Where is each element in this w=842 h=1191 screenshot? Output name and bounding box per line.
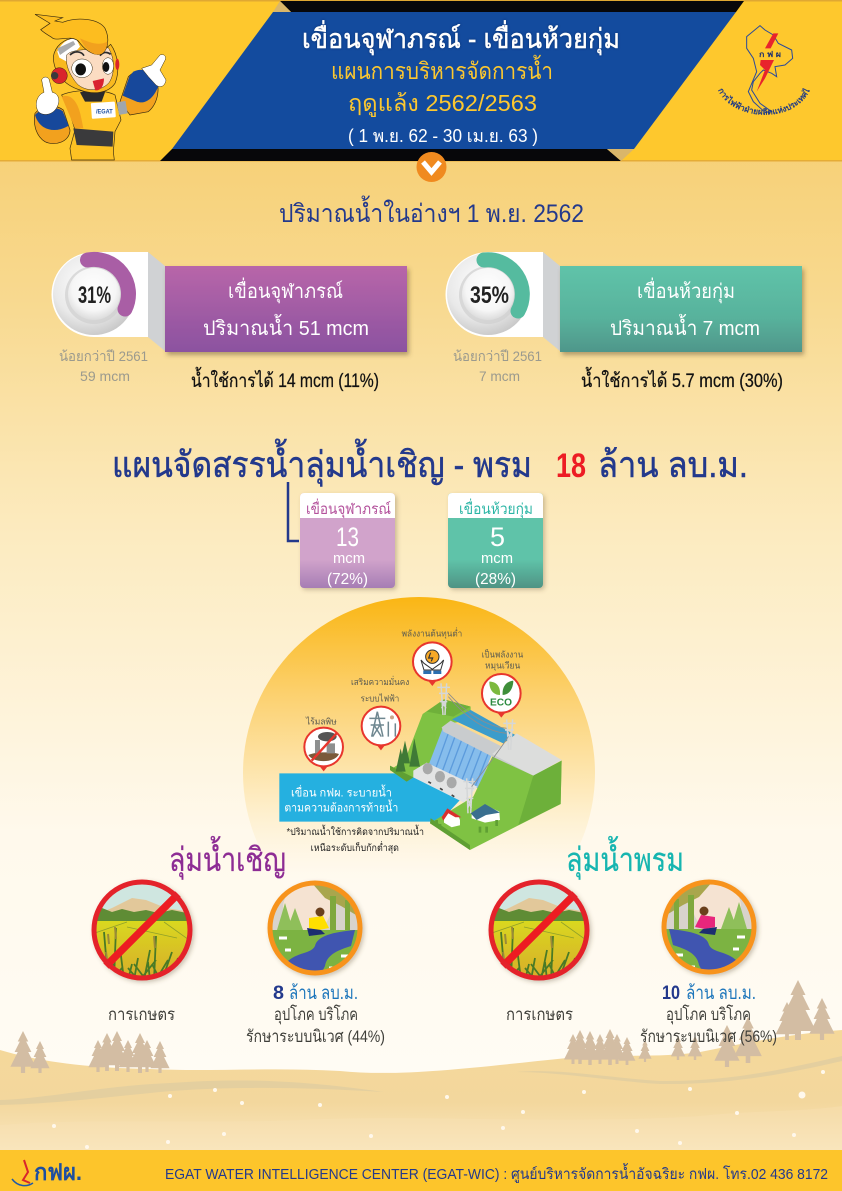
landscape: hills, trees and flowers [0, 980, 842, 1151]
blue release label: ตามความต้องการท้ายน้ำ [284, 800, 398, 815]
card: Chulabhorn allocation: mcm [333, 550, 365, 567]
heading: allocation plan: ล้าน ลบ.ม. [598, 444, 748, 485]
card: Huai Kum allocation: 5 [490, 522, 505, 552]
mascot face [66, 48, 113, 90]
map outline [747, 26, 793, 112]
footnote: เหนือระดับเก็บกักต่ำสุด [311, 841, 399, 854]
dam crest and road [442, 721, 535, 776]
card: Chulabhorn allocation [300, 493, 395, 588]
footer logo [12, 1159, 82, 1186]
pin: low cost energy [402, 627, 462, 686]
EGAT badge: /EGAT [96, 109, 113, 116]
gauge 31%: 31% [78, 282, 111, 309]
card: Chulabhorn allocation: 13 [336, 522, 359, 552]
text: Chern ecosystem allocation: 8 [273, 983, 284, 1004]
header title lines: เขื่อนจุฬาภรณ์ - เขื่อนห้วยกุ่ม [302, 20, 620, 56]
text: Phrom ecosystem allocation: รักษาระบบนิเวศ (56%) [640, 1027, 777, 1046]
gauge 35%: 35% [470, 282, 509, 309]
pin: stable power system: เสริมความมั่นคง [351, 675, 409, 687]
date range: ( 1 พ.ย. 62 - 30 เม.ย. 63 ) [348, 126, 538, 146]
logo letters: ก ฟ ผ [759, 50, 781, 59]
EGAT badge [91, 102, 116, 119]
previous year note: น้อยกว่าปี 2561 [59, 348, 148, 364]
header subtitle: แผนการบริหารจัดการน้ำ [331, 55, 553, 84]
icon: ecosystem, Phrom [663, 881, 755, 975]
teal value box [560, 266, 802, 352]
bottom black strip [160, 149, 621, 161]
pine trees [396, 738, 420, 772]
blue release label [279, 773, 460, 822]
reservoir water [452, 710, 515, 743]
card: Huai Kum allocation [448, 493, 543, 588]
panel: Huai Kum dam [446, 252, 802, 392]
mascot left hand [36, 77, 59, 114]
card: Chulabhorn allocation: (72%) [327, 571, 368, 588]
pin: renewable energy ECO: ECO [490, 698, 512, 709]
right tree clusters [564, 980, 835, 1067]
label: agriculture, Phrom: การเกษตร [506, 1005, 573, 1024]
footnote: *ปริมาณน้ำใช้การคิดจากปริมาณน้ำ [287, 824, 424, 838]
heading: allocation plan: แผนจัดสรรน้ำลุ่มน้ำเชิญ - พรม [112, 438, 532, 487]
text: Chern ecosystem allocation: รักษาระบบนิเวศ (44%) [246, 1027, 385, 1046]
lightning bolt lower [757, 60, 774, 92]
previous year note [453, 348, 542, 384]
icon: ecosystem, Chern [269, 882, 361, 976]
card: Huai Kum allocation: mcm [481, 550, 513, 567]
top black strip [280, 1, 744, 12]
EGAT logo: Thailand map [718, 25, 810, 115]
transmission towers [437, 683, 516, 813]
lightning bolt upper [765, 33, 778, 48]
sun semicircle backdrop [243, 597, 595, 949]
text: Phrom ecosystem allocation [640, 983, 777, 1046]
teal value box: ปริมาณน้ำ 7 mcm [610, 314, 760, 340]
text: Phrom ecosystem allocation: ล้าน ลบ.ม. [686, 983, 756, 1004]
meadow flowers [52, 1070, 825, 1149]
footer bar [0, 1150, 842, 1191]
heading: allocation plan [112, 438, 748, 487]
text: Chern ecosystem allocation: ล้าน ลบ.ม. [289, 983, 358, 1004]
header band [0, 0, 842, 162]
usable water: น้ำใช้การได้ 5.7 mcm (30%) [581, 367, 783, 392]
pin: renewable energy ECO: เป็นพลังงาน [482, 647, 523, 659]
section heading: water volume: ปริมาณน้ำในอ่างฯ 1 พ.ย. 2562 [279, 195, 584, 228]
purple value box: ปริมาณน้ำ 51 mcm [203, 314, 369, 340]
pin: no pollution [304, 717, 343, 771]
icon: no agriculture, Phrom [489, 880, 589, 983]
heading: Chern basin: ลุ่มน้ำเชิญ [169, 836, 286, 880]
mascot left arm [34, 106, 70, 144]
previous year note: 7 mcm [479, 368, 520, 384]
purple value box [165, 266, 407, 352]
mascot helmet [53, 38, 118, 93]
mascot torso [62, 91, 121, 160]
white tab and fold [52, 252, 148, 337]
footer logo: กฟผ. [34, 1159, 82, 1185]
pin: low cost energy: พลังงานต้นทุนต่ำ [402, 627, 462, 640]
left green hill [390, 699, 471, 782]
arc guide for organisation name [718, 90, 810, 115]
spillway [427, 727, 492, 788]
card: Huai Kum allocation: เขื่อนห้วยกุ่ม [459, 498, 533, 519]
season text: ฤดูแล้ง 2562/2563 [348, 90, 537, 117]
dam illustration [279, 627, 562, 854]
left tree clusters [10, 1031, 170, 1073]
text: Chern ecosystem allocation: อุปโภค บริโภค [274, 1004, 358, 1025]
pin: stable power system: ระบบไฟฟ้า [361, 694, 399, 704]
mascot right arm [120, 71, 158, 115]
houses [444, 810, 460, 827]
mascot headphone [51, 68, 67, 84]
heading: allocation plan: 18 [556, 447, 586, 485]
label: agriculture, Chern: การเกษตร [108, 1005, 175, 1024]
concrete base [413, 763, 477, 803]
panel: Chulabhorn dam [52, 252, 407, 392]
blue release label: เขื่อน กฟผ. ระบายน้ำ [291, 785, 392, 800]
card: Chulabhorn allocation: เขื่อนจุฬาภรณ์ [306, 498, 391, 519]
mascot helmet crest [35, 14, 108, 54]
previous year note: 59 mcm [80, 368, 130, 384]
mascot character [34, 14, 166, 160]
text: Phrom ecosystem allocation: 10 [662, 983, 680, 1004]
pin: renewable energy ECO [482, 647, 523, 718]
icon: no agriculture, Chern [92, 880, 192, 983]
mascot right hand [142, 55, 166, 87]
gauge 31% [53, 253, 135, 335]
text: Phrom ecosystem allocation: อุปโภค บริโภค [666, 1004, 751, 1025]
blue parallelogram [172, 12, 736, 149]
previous year note [59, 348, 148, 384]
usable water: น้ำใช้การได้ 14 mcm (11%) [191, 367, 379, 392]
purple value box: เขื่อนจุฬาภรณ์ [228, 277, 343, 304]
previous year note: น้อยกว่าปี 2561 [453, 348, 542, 364]
bracket connector [288, 482, 299, 541]
teal value box: เขื่อนห้วยกุ่ม [637, 277, 735, 304]
footnote [287, 824, 424, 854]
pin: no pollution: ไร้มลพิษ [305, 717, 337, 727]
heading: Phrom basin: ลุ่มน้ำพรม [566, 836, 684, 880]
card: Huai Kum allocation: (28%) [475, 571, 516, 588]
pin: stable power system [351, 675, 409, 750]
right green slope [430, 757, 562, 850]
text: Chern ecosystem allocation [246, 983, 385, 1046]
chevron badge [416, 152, 446, 182]
white tab and fold [446, 252, 543, 337]
pin: renewable energy ECO: หมุนเวียน [485, 661, 520, 672]
gauge 35% [447, 253, 529, 335]
